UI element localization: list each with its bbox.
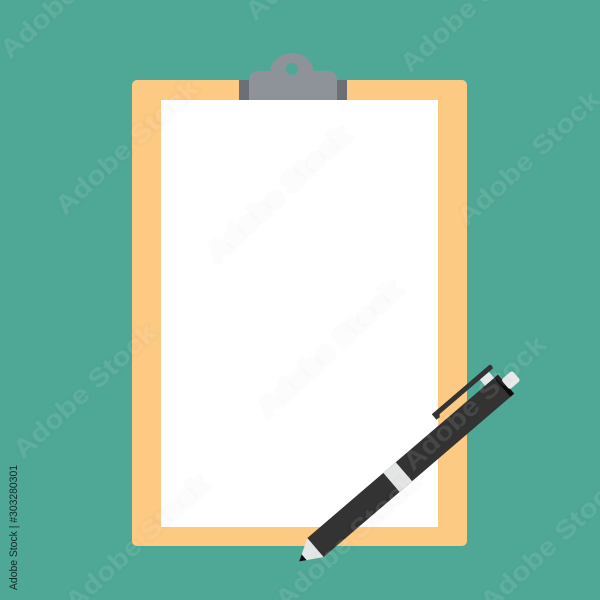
pen push button [501,370,521,390]
pen barrel [307,375,513,557]
pen band [383,462,412,492]
pen [283,356,524,571]
stock watermarks: Adobe Stock [451,84,600,231]
pen cone [291,538,324,571]
pen end ring [494,375,514,397]
stock watermarks: Adobe Stock [397,329,552,476]
metal clip [239,53,347,100]
paper sheet [161,100,438,527]
stock watermarks: Adobe Stock [201,120,356,267]
pen clip connector [480,371,494,386]
pen clip [432,364,495,420]
clipboard board [132,80,467,546]
clipboard [132,53,467,546]
stock id label: Adobe Stock | #303280301 [8,465,20,590]
stock watermarks: Adobe Stock [7,317,162,464]
stock watermarks: Adobe Stock [252,275,407,422]
pen tip [297,554,307,564]
stock watermarks: Adobe Stock [49,73,204,220]
